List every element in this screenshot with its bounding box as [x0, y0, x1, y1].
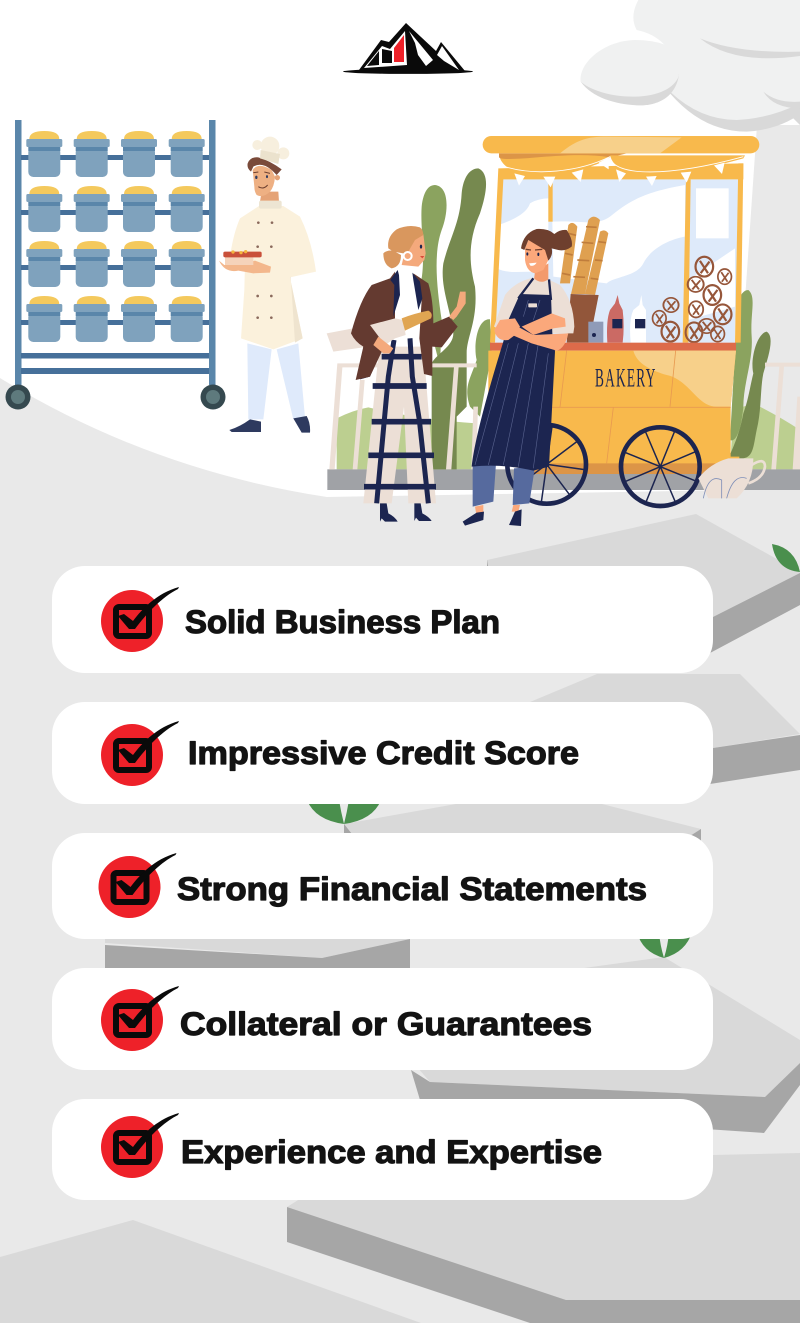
- chef: [219, 137, 316, 433]
- card: Collateral or Guarantees: [52, 968, 713, 1070]
- card: Experience and Expertise: [52, 1099, 713, 1200]
- card label: Strong Financial Statements: [177, 871, 647, 907]
- stone steps: [0, 514, 800, 1323]
- card: Impressive Credit Score: [52, 702, 713, 804]
- cart cabin: [490, 163, 743, 343]
- pretzels: [653, 257, 731, 342]
- jug: [698, 458, 765, 498]
- woman in apron: [463, 229, 574, 526]
- card: Strong Financial Statements: [52, 833, 713, 939]
- bakery rack: [6, 120, 226, 410]
- card label: Solid Business Plan: [185, 604, 500, 640]
- basket and goods: [567, 294, 646, 343]
- leaves: [307, 544, 800, 958]
- pavement strip: [327, 469, 800, 490]
- bunting: [500, 157, 743, 187]
- check icon: [101, 1113, 179, 1178]
- hills: [337, 403, 800, 469]
- bakery scene: cart and two women: [327, 136, 800, 526]
- plants behind: [420, 168, 771, 469]
- card: Solid Business Plan: [52, 566, 713, 673]
- cart body: [488, 351, 739, 474]
- card label: Collateral or Guarantees: [180, 1006, 592, 1042]
- counter: [490, 343, 736, 351]
- cloud: [581, 0, 800, 132]
- check icon: [101, 721, 179, 786]
- wheels: [503, 417, 710, 517]
- card label: Impressive Credit Score: [188, 735, 579, 771]
- card label: Experience and Expertise: [181, 1134, 602, 1170]
- check icon: [101, 986, 179, 1051]
- baguettes: [560, 217, 608, 295]
- bakery sign text: BAKERY: [595, 363, 657, 393]
- woman with baguette: [327, 226, 466, 522]
- railing: [329, 363, 800, 469]
- check icon: [98, 853, 176, 918]
- cart roof: [483, 136, 759, 177]
- logo: [343, 23, 473, 74]
- check icon: [101, 587, 179, 652]
